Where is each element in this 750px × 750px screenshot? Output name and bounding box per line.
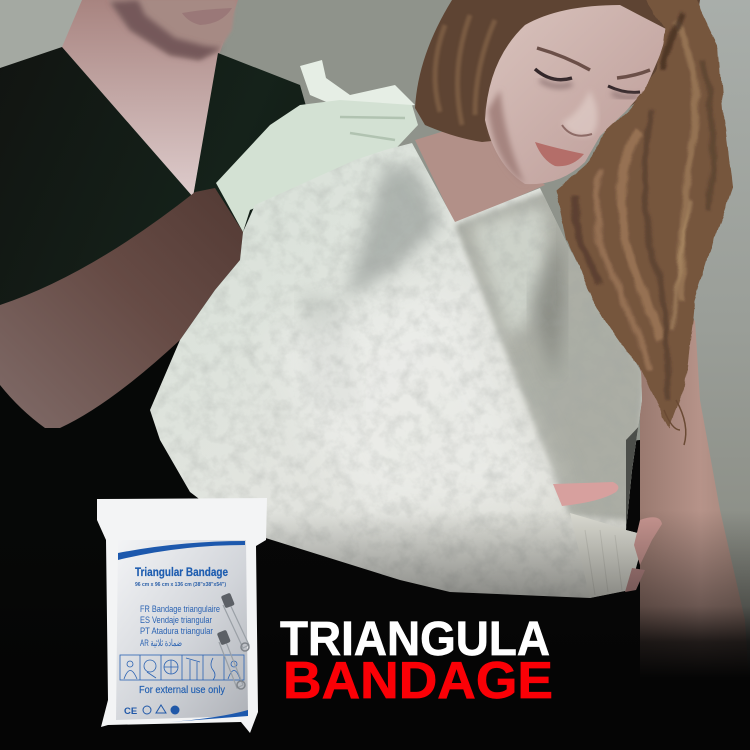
- man in dark scrubs: [0, 0, 310, 750]
- translations: [140, 604, 220, 649]
- translations: AR ضمادة ثلاثية: [140, 638, 182, 649]
- usage note: For external use only: [139, 684, 226, 696]
- woman's face: [485, 5, 668, 184]
- headline white line: TRIANGULA: [280, 613, 550, 666]
- man's lower face: [108, 0, 236, 60]
- bright front panel: [294, 308, 564, 507]
- fabric corner: [300, 60, 415, 112]
- woman's arm: [640, 320, 750, 700]
- gown strip beside arm: [626, 427, 638, 528]
- translations: FR Bandage triangulaire: [140, 604, 220, 615]
- gloved hand holding fabric: [216, 60, 418, 232]
- package title: Triangular Bandage: [135, 565, 228, 579]
- wrist cuff: [570, 513, 645, 598]
- arm sling: [150, 140, 650, 600]
- man's forearm: [0, 188, 243, 428]
- plastic bag: [97, 498, 267, 733]
- translations: PT Atadura triangular: [140, 626, 213, 637]
- woman's hair behind face: [415, 0, 700, 142]
- top blue swoosh: [118, 541, 245, 560]
- inner fold panel: [455, 188, 645, 520]
- dark fade at bottom: [0, 510, 750, 750]
- compliance symbols: [124, 705, 180, 717]
- instruction icon strip: [120, 655, 244, 680]
- woman's neck: [415, 120, 545, 224]
- safety pins: [217, 593, 249, 689]
- headline red line: BANDAGE: [283, 652, 553, 710]
- dark torso behind sling: [200, 440, 660, 750]
- glove: [216, 100, 418, 232]
- woman's hair, right side: [556, 0, 732, 445]
- lips: [535, 142, 584, 166]
- eyes: [535, 69, 572, 80]
- product package: [97, 498, 267, 733]
- man's neck and chest: [62, 0, 238, 197]
- size line: 96 cm x 96 cm x 136 cm (38"x38"x54"): [135, 582, 226, 588]
- headline: [280, 613, 553, 710]
- translations: ES Vendaje triangular: [140, 615, 212, 626]
- scrubs top: [0, 47, 310, 750]
- shoulder shadow: [345, 165, 440, 300]
- bottom blue swoosh: [170, 710, 248, 722]
- nose: [562, 90, 597, 136]
- man's lower body: [0, 300, 260, 750]
- printed label: [116, 540, 248, 720]
- compliance symbols: CE: [124, 706, 137, 717]
- woman's fingers: [553, 482, 662, 592]
- woman's hair, left strands: [435, 15, 495, 125]
- fabric texture: [152, 152, 608, 596]
- cheek shadow: [488, 90, 525, 184]
- eyebrows: [537, 48, 590, 70]
